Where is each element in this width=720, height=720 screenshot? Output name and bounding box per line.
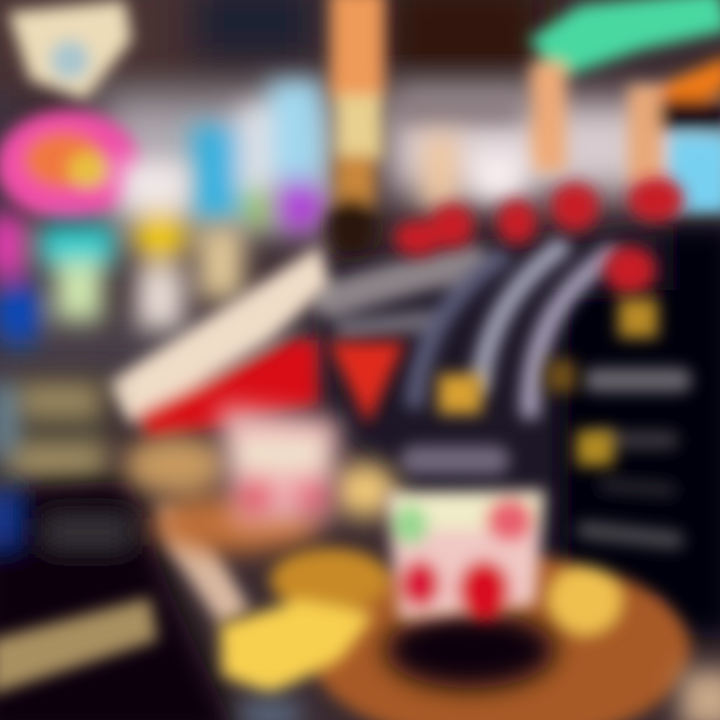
mid white band details [395,100,525,210]
pastry pile [220,548,390,695]
snack pastry [123,435,397,553]
upper background [0,0,720,390]
lower left dark area [0,480,240,720]
tan rolling pin [0,597,158,695]
red blobs [394,178,684,294]
rear cup [218,405,340,525]
pink disc [0,110,140,220]
dark counter [320,225,720,640]
left shelves [0,375,110,490]
grey arcs [330,248,680,540]
bottom corner [240,670,720,720]
orange pole [326,0,385,258]
pale diagonal strip [160,500,250,625]
red triangle sign [328,342,405,425]
left stall items [0,160,244,346]
light blue panels [192,80,324,231]
red banner [105,245,330,440]
yellow tags [438,298,658,466]
poster top left [8,0,132,100]
front cup [385,490,545,620]
dark saucer [385,612,555,688]
copper plate [310,555,690,720]
teal awning [528,0,720,215]
